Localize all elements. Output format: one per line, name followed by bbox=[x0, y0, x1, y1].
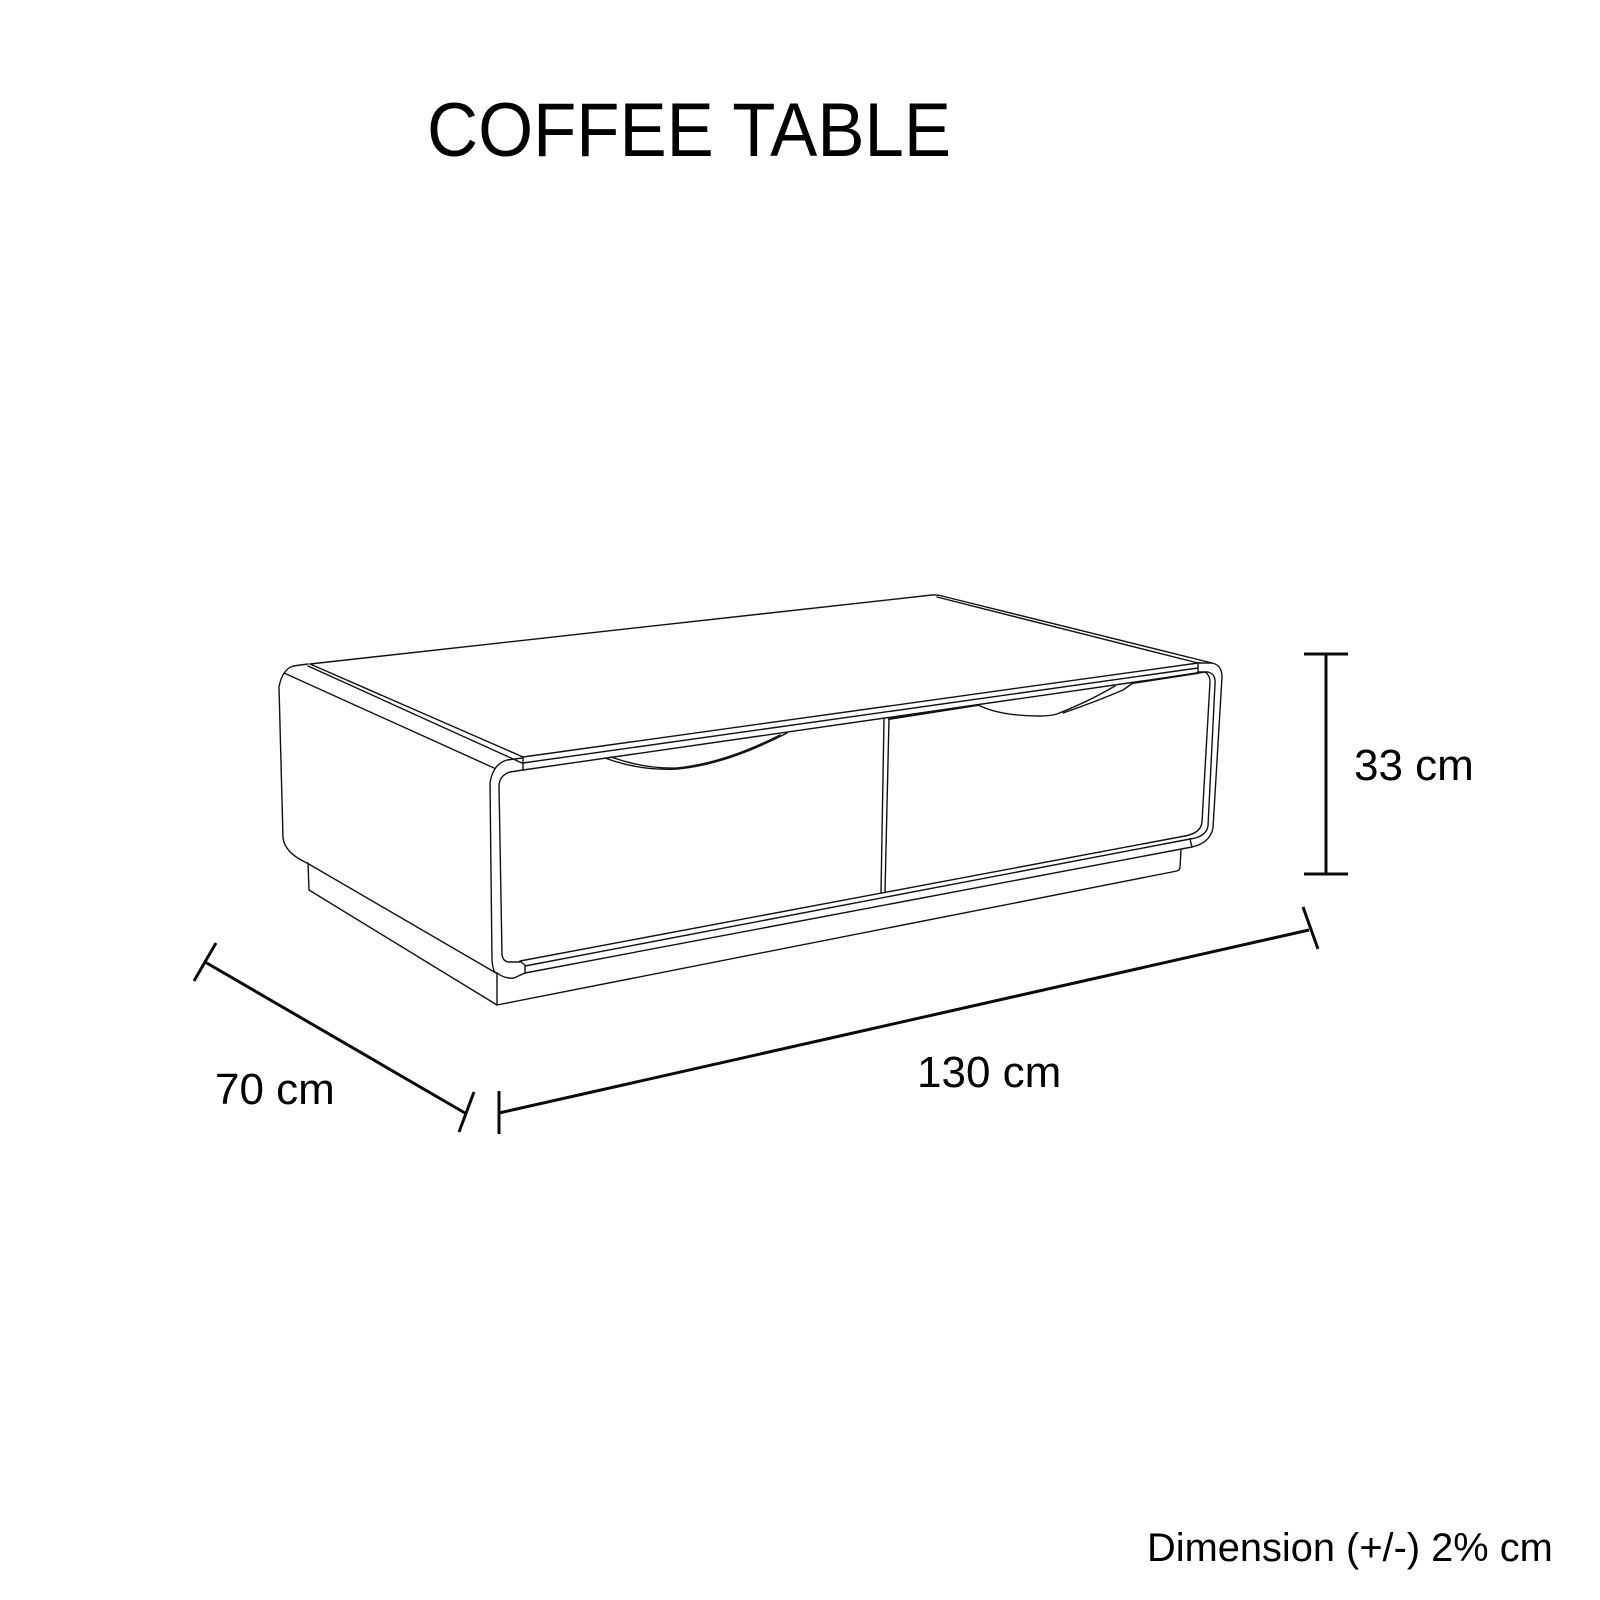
front top rail bbox=[523, 672, 1205, 770]
right drawer handle bbox=[889, 673, 1198, 719]
left drawer handle bbox=[605, 733, 787, 769]
side panel bbox=[279, 664, 496, 973]
title: COFFEE TABLE bbox=[427, 88, 951, 173]
height dimension 33 cm: 33 cm bbox=[1354, 741, 1474, 790]
drawer divider bbox=[881, 719, 889, 893]
height dimension 33 cm bbox=[1304, 654, 1474, 874]
front bottom rails bbox=[520, 836, 1192, 973]
left front corner frame bbox=[490, 758, 525, 978]
depth dimension 70 cm bbox=[194, 943, 474, 1132]
depth dimension 70 cm: 70 cm bbox=[215, 1065, 335, 1114]
coffee table line drawing bbox=[279, 595, 1222, 1005]
plinth base bbox=[308, 850, 1181, 1005]
tolerance note: Dimension (+/-) 2% cm bbox=[1147, 1526, 1553, 1570]
length dimension 130 cm bbox=[499, 907, 1318, 1134]
right front corner frame bbox=[1185, 663, 1222, 847]
table top surface bbox=[308, 595, 1212, 770]
length dimension 130 cm: 130 cm bbox=[917, 1048, 1061, 1097]
